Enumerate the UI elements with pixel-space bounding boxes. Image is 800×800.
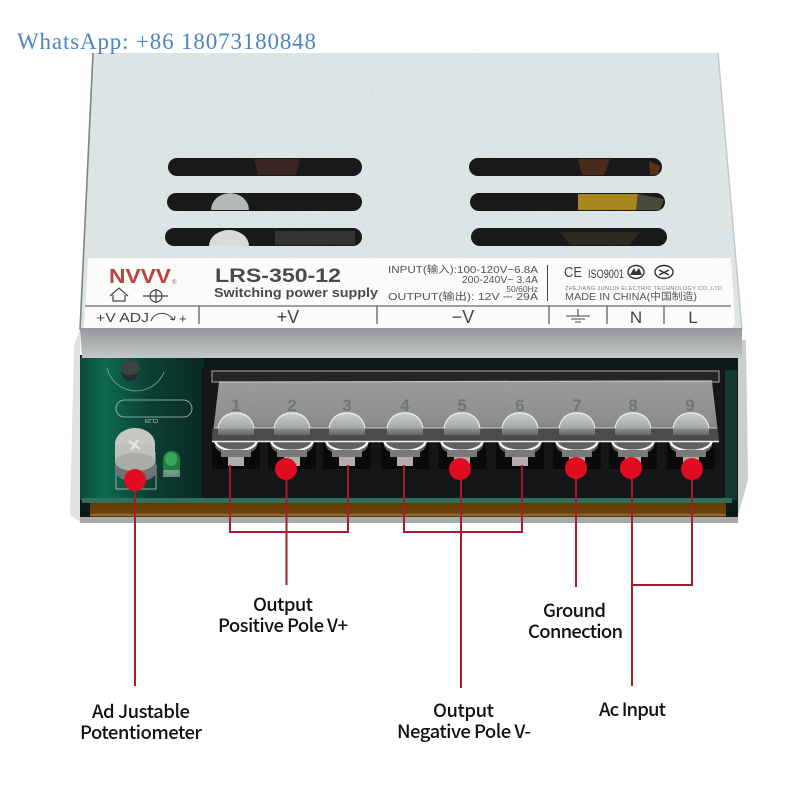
caption: potentiometer: Potentiometer	[80, 719, 202, 745]
terminal numbers: 5	[457, 396, 467, 415]
caption: negative pole: Negative Pole V-	[397, 718, 531, 744]
terminal screws	[212, 435, 715, 469]
registered mark: ®	[172, 279, 177, 286]
terminal numbers	[231, 396, 695, 415]
PCB edge and amber strip	[80, 498, 738, 523]
caption: ground: Connection	[528, 618, 623, 644]
callout lines	[135, 465, 692, 688]
grey label fold	[80, 328, 742, 358]
line: AC input	[632, 468, 692, 686]
ventilation slots	[165, 158, 667, 246]
caption: potentiometer: Ad Justable	[92, 698, 190, 724]
electrical specs: 50/60Hz	[506, 284, 538, 294]
terminal header row: −V	[452, 307, 474, 327]
terminal numbers: 9	[685, 396, 695, 415]
caption: ground: Ground	[543, 597, 606, 623]
circuit board: CL29	[145, 417, 158, 423]
terminal numbers: 1	[231, 396, 241, 415]
dark interior	[80, 355, 738, 520]
power supply photo	[70, 53, 748, 523]
screw domes under the cover	[218, 412, 709, 435]
terminal block base	[202, 367, 725, 498]
vertical spec divider	[547, 265, 548, 301]
line: ground	[575, 468, 577, 587]
caption: negative pole: Output	[433, 697, 495, 723]
caption: AC input: Ac Input	[599, 696, 667, 722]
caption: positive pole: Positive Pole V+	[218, 612, 348, 638]
terminal numbers: 8	[628, 396, 638, 415]
callout dots	[124, 457, 703, 491]
left metal side wall	[70, 330, 82, 523]
electrical specs: INPUT(输入):100-120V~6.8A	[388, 263, 538, 276]
product label	[84, 258, 735, 328]
right metal side wall	[732, 340, 748, 522]
terminal header row: +V ADJ	[96, 311, 149, 325]
maker text: ZHEJIANG JUNLIN ELECTRIC TECHNOLOGY CO.,LTD	[565, 286, 722, 292]
PCB right sliver	[725, 370, 737, 500]
electrical specs: 200-240V~ 3.4A	[462, 274, 538, 286]
terminal header row: L	[688, 308, 698, 327]
circuit board	[80, 357, 204, 500]
terminal numbers: 4	[400, 396, 410, 415]
watermark: WhatsApp: WhatsApp: +86 18073180848	[17, 29, 316, 54]
certifications: CE	[564, 264, 582, 281]
line: positive pole	[230, 465, 348, 585]
house and cert icons	[110, 288, 168, 303]
made in china: MADE IN CHINA(中国制造)	[565, 290, 697, 303]
terminal header row: +	[179, 311, 187, 326]
terminal header row: +V	[277, 307, 299, 327]
terminal numbers: 3	[342, 396, 352, 415]
line: potentiometer	[134, 480, 136, 686]
terminal numbers: 7	[572, 396, 582, 415]
model: LRS-350-12	[215, 266, 341, 287]
terminal header row	[85, 306, 731, 327]
line: negative pole	[404, 465, 522, 688]
potentiometer	[115, 428, 156, 482]
caption: positive pole: Output	[253, 591, 314, 617]
brand: NVVV	[109, 266, 172, 288]
certifications: ISO9001	[588, 267, 624, 281]
electrical specs	[388, 263, 538, 303]
terminal numbers: 6	[515, 396, 525, 415]
certifications	[564, 264, 673, 281]
electrical specs: OUTPUT(输出): 12V ⎓ 29A	[388, 290, 538, 303]
LED	[163, 451, 180, 477]
terminal numbers: 2	[287, 396, 297, 415]
terminal header row: N	[630, 308, 642, 327]
metal top cover	[80, 53, 742, 330]
product type: Switching power supply	[214, 286, 378, 300]
clear terminal cover	[212, 371, 719, 442]
